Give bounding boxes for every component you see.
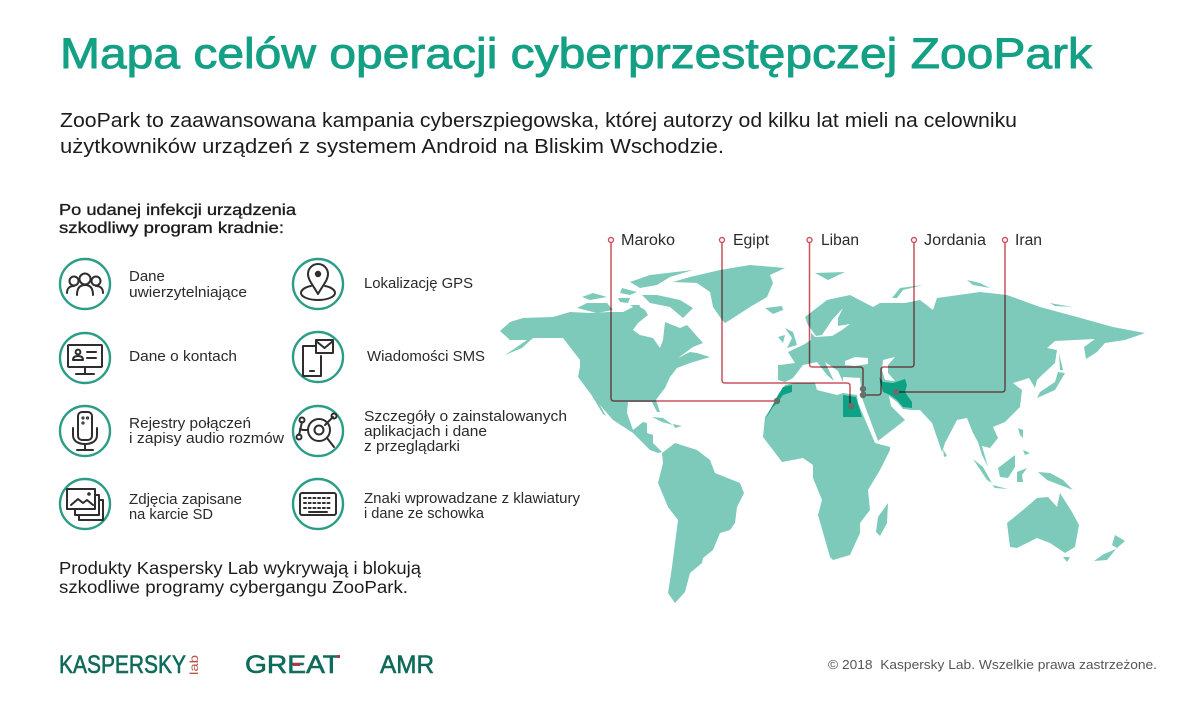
country labels: Egipt [733, 232, 770, 249]
Eurasia [778, 292, 1145, 467]
text: apps and browser details: Szczegóły o zainstalowanych [364, 408, 567, 425]
Canadian Arctic islands [577, 270, 693, 318]
Baja California [592, 396, 606, 416]
icon: credentials [60, 259, 110, 309]
icon: contacts [60, 333, 110, 383]
Australia [1007, 493, 1079, 562]
intro text: użytkowników urządzeń z systemem Android na Bliskim Wschodzie. [60, 136, 724, 158]
Iceland, Britain, Ireland, Svalbard and Arctic islands [765, 272, 1072, 348]
icon: apps and browser details [293, 406, 343, 456]
text: apps and browser details: aplikacjach i dane [364, 423, 487, 440]
text: contacts: Dane o kontach [129, 348, 237, 365]
Iran [879, 377, 912, 408]
text: credentials [129, 268, 247, 301]
Lebanon and Jordan [861, 387, 866, 397]
Southeast Asia islands [943, 428, 1073, 490]
icon: call logs [60, 406, 110, 456]
Madagascar [876, 503, 888, 536]
logo: AMR: AMR [380, 651, 434, 679]
detection statement: Produkty Kaspersky Lab wykrywają i blokują [59, 558, 421, 578]
copyright: © 2018 Kaspersky Lab. Wszelkie prawa zastrzeżone. [828, 657, 1157, 672]
Caribbean [652, 417, 682, 428]
inland seas [845, 357, 895, 381]
text: photos: Zdjęcia zapisane [129, 491, 242, 508]
list heading: Po udanej infekcji urządzenia [59, 202, 296, 219]
New Zealand [1094, 535, 1125, 561]
Caucasus and Levant land [860, 350, 884, 396]
list heading: szkodliwy program kradnie: [59, 220, 284, 237]
South America [658, 443, 744, 603]
list heading [59, 202, 296, 237]
highlighted countries [765, 377, 912, 420]
intro text [60, 110, 1017, 158]
country labels: Iran [1015, 232, 1042, 249]
country labels: Liban [821, 232, 859, 249]
text: photos [129, 491, 242, 523]
text: keyboard [364, 490, 580, 522]
detection statement: szkodliwe programy cybergangu ZooPark. [59, 577, 408, 597]
Japan and Sakhalin [1037, 353, 1065, 398]
Morocco [765, 385, 792, 420]
text: call logs: Rejestry połączeń [129, 415, 251, 432]
map markers [774, 386, 899, 409]
logo: GREAT: GREAT [245, 651, 340, 679]
text: credentials: uwierzytelniające [129, 284, 247, 301]
North America [500, 305, 710, 453]
text: credentials: Dane [129, 268, 165, 285]
title: Mapa celów operacji cyberprzestępczej ZooPark [60, 30, 1093, 78]
detection statement [59, 558, 421, 597]
Greenland [673, 265, 785, 323]
country labels: Jordania [924, 232, 986, 249]
icon: photos [60, 479, 110, 529]
country labels: Maroko [621, 232, 675, 249]
text: keyboard: Znaki wprowadzane z klawiatury [364, 490, 580, 507]
text: keyboard: i dane ze schowka [364, 505, 485, 522]
logo: Kaspersky Lab: lab [187, 655, 201, 675]
text: photos: na karcie SD [129, 506, 213, 523]
text: apps and browser details [364, 408, 567, 455]
text: call logs: i zapisy audio rozmów [129, 430, 284, 447]
text: GPS: Lokalizację GPS [364, 275, 473, 292]
text: SMS: Wiadomości SMS [367, 348, 485, 365]
connector lines [611, 243, 1005, 406]
text: apps and browser details: z przeglądarki [364, 438, 460, 455]
Egypt [843, 395, 862, 417]
icon: GPS [293, 259, 343, 309]
world map [500, 265, 1145, 603]
country labels [608, 232, 1042, 249]
icon: SMS [293, 332, 343, 382]
text: call logs [129, 415, 284, 447]
logo: Kaspersky Lab: KASPERSKY [59, 651, 186, 679]
intro text: ZooPark to zaawansowana kampania cyberszpiegowska, której autorzy od kilku lat mieli na celowniku [60, 110, 1017, 132]
icon: keyboard [293, 479, 343, 529]
Africa [763, 383, 890, 560]
